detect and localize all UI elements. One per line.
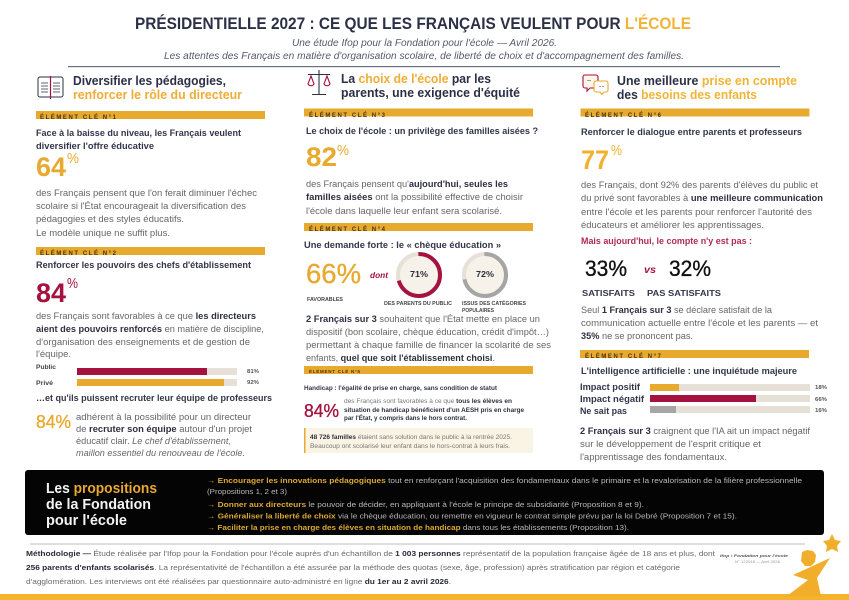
body text 64% [36,188,258,238]
key element 4: ÉLÉMENT CLÉ N°4 [309,225,386,233]
body text 84% [36,311,264,359]
dont: dont [370,270,389,280]
stat 77% [581,142,622,175]
key element 2 [36,247,265,257]
propositions list [207,476,802,532]
body text 84%: des Français sont favorables à ce que les directeurs [36,311,256,321]
stat 66%: FAVORABLES [307,297,344,303]
body text satisfaction: communication actuelle entre l'école et les parents — et [581,318,819,328]
key element 4 question: Une demande forte : le « chèque éducation » [304,240,501,250]
propositions list: → Généraliser la liberté de choix via le chèque éducation, ou remettre en vigueur le contrat simple prévu par la loi Debré (Proposition 7 et 15). [207,512,737,520]
body text 77%: des Français, dont 92% des parents d'élèves du public et [581,180,819,190]
stat comparison 33% vs 32%: PAS SATISFAITS [647,289,722,298]
callout: 48 726 familles: Beaucoup ont scolarisé leur enfant dans le hors-contrat à leurs frais. [310,443,510,450]
body text IA: sur le développement de l'esprit critique et [580,439,762,449]
stat 66% [306,258,361,303]
body text 66% [306,314,552,363]
stat comparison 33% vs 32%: 33% [585,256,627,281]
bar chart: public / privé: 92% [247,380,259,386]
methodology [26,549,715,586]
key element 7 question: L'intelligence artificielle : une inquiétude majeure [581,366,797,376]
body text 77%: éducateurs et améliorer les apprentissages. [581,220,764,230]
subtitle: Les attentes des Français en matière d'organisation scolaire, de liberté de choix et d'accompagnement des familles. [164,51,684,62]
bottom bar [0,594,849,600]
stat 82% [306,142,349,172]
title: PRÉSIDENTIELLE 2027 : CE QUE LES FRANÇAIS VEULENT POUR L'ÉCOLE [135,14,691,33]
key element 6 [580,108,810,119]
body text 82%: des Français pensent qu' aujourd'hui, seules les [306,179,508,189]
panel: diversifier les pédagogies [36,73,272,458]
body text IA [580,426,811,462]
donut: 71% parents du public: DES PARENTS DU PUBLIC [384,301,452,307]
body text 66%: enfants, quel que soit l'établissement choisi. [306,353,495,363]
stat 77%: % [611,142,622,159]
heading [617,73,797,102]
body text 64%: Le modèle unique ne suffit plus. [36,228,170,238]
donut: 72% catégories populaires: ISSUS DES CATÉGORIES [462,299,527,307]
propositions list: → Donner aux directeurs le pouvoir de décider, en appliquant à l'école le principe de subsidiarité (Proposition 8 et 9). [207,500,644,509]
icon: speech bubbles [583,75,608,94]
heading: des besoins des enfants [617,87,757,102]
bar chart: intelligence artificielle: Impact négatif [580,394,645,404]
subtitle: Une étude Ifop pour la Fondation pour l'école — Avril 2026. [292,38,557,49]
bar chart: intelligence artificielle [580,382,827,416]
body text IA: 2 Français sur 3 craignent que l'IA ait un impact négatif [580,426,811,436]
key element 3: ÉLÉMENT CLÉ N°3 [309,111,386,119]
stat 84% recruit: 84% [36,412,71,432]
methodology: 256 parents d'enfants scolarisés . La représentativité de l'échantillon a été assurée par la méthode des quotas (sexe, âge, profession) après stratification par région et catégorie [26,563,680,572]
bar chart: intelligence artificielle: Ne sait pas [580,406,627,416]
body text IA: l'apprentissage des fondamentaux. [580,452,727,462]
heading: La choix de l'école par les [341,71,491,86]
icon: foundation logo [787,534,841,596]
stat 84%: % [67,275,78,292]
stat comparison 33% vs 32%: vs [644,265,656,276]
heading: parents, une exigence d'équité [341,85,520,100]
subtitle [164,38,684,62]
stat 82%: 82 [306,142,337,172]
bar chart: intelligence artificielle: 18% [815,385,827,391]
key element 6: ÉLÉMENT CLÉ N°6 [585,111,662,119]
source note: Ifop • Fondation pour l'école [720,553,789,558]
heading: Diversifier les pédagogies, [73,73,226,88]
body text satisfaction [581,305,819,341]
key element 5: ÉLÉMENT CLÉ N°5 [309,367,360,374]
body text recruit: éducatif clair. Le chef d'établissement, [76,436,231,446]
stat comparison 33% vs 32% [582,256,722,298]
source note [720,553,789,564]
donut: 71% parents du public [384,254,452,307]
body text 82%: familles aisées ont la possibilité effective de choisir [306,192,523,202]
heading: Une meilleure prise en compte [617,73,797,88]
body text 82% [306,179,523,216]
key element 3 [304,108,533,119]
stat 64% [36,150,79,182]
body text 77% [581,180,823,230]
body text 66%: permettant à chaque famille de financer la scolarité de ses [306,340,552,350]
key element 1: ÉLÉMENT CLÉ N°1 [40,113,117,121]
panel: besoins des enfants [580,73,827,462]
key element 2 question: Renforcer les pouvoirs des chefs d'établissement [36,260,251,270]
methodology: Méthodologie — Étude réalisée par l'Ifop pour la Fondation pour l'école auprès d'un échantillon de 1 003 personnes représentatif de la population française âgée de 18 ans et plus, dont [26,549,715,558]
bar chart: public / privé: 81% [247,369,259,375]
bar chart: intelligence artificielle: 16% [815,408,827,414]
stat 84%: 84 [36,278,66,308]
body text handicap [344,398,524,422]
body text 82%: l'école dans laquelle leur enfant sera scolarisé. [306,206,502,216]
propositions heading: de la Fondation [46,496,151,513]
body text recruit: de recruter son équipe autour d'un projet [76,424,253,434]
body text 77%: du privé sont favorables à une meilleure communication [581,193,823,203]
propositions list: → Encourager les innovations pédagogiques tout en renforçant l'acquisition des fondamentaux dans le primaire et la revalorisation de la filière professionnelle [207,476,802,485]
body text 64%: des Français pensent que l'on ferait diminuer l'échec [36,188,258,198]
propositions heading [46,480,157,529]
donut: 71% parents du public: 71% [410,270,428,279]
panel: choix de l'école [304,70,552,453]
donut: 72% catégories populaires [462,254,527,314]
stat 64%: % [67,150,79,167]
donut: 72% catégories populaires: POPULAIRES [462,308,495,314]
key element 1 question: diversifier l'offre éducative [36,141,154,151]
icon: scales [308,70,330,94]
propositions list: → Faciliter la prise en charge des élèves en situation de handicap dans tous les établissements (Proposition 13). [207,523,629,532]
stat 77%: 77 [581,145,609,175]
key element 1 question [36,128,241,151]
methodology: d'agglomération. Les interviews ont été réalisées par questionnaire auto-administré en ligne du 1er au 2 avril 2026 . [26,577,451,586]
key element 7: ÉLÉMENT CLÉ N°7 [585,352,662,360]
body text 84%: d'organisation des enseignements et de gestion de [36,337,250,347]
sub-heading recruitment: …et qu'ils puissent recruter leur équipe de professeurs [36,393,272,403]
body text 66%: dispositif (bon scolaire, chèque éducation, crédit d'impôt…) [306,327,549,337]
stat 84% [36,275,78,308]
key element 5 question: Handicap : l'égalité de prise en charge, sans condition de statut [304,385,498,392]
bar chart: public / privé: Privé [36,381,54,387]
body text recruit: maillon essentiel du renouveau de l'école. [76,448,245,458]
body text 77%: entre l'école et les parents pour renforcer l'autorité des [581,207,813,217]
key element 2: ÉLÉMENT CLÉ N°2 [40,249,117,257]
callout: 48 726 familles: 48 726 familles étaient sans solution dans le public à la rentrée 2025. [310,434,512,441]
body text 84%: l'équipe. [36,349,71,359]
bar chart: public / privé: Public [36,365,57,371]
body text 66%: 2 Français sur 3 souhaitent que l'État mette en place un [306,314,540,324]
key element 1 question: Face à la baisse du niveau, les Français veulent [36,128,241,138]
body text handicap: situation de handicap bénéficient d'un AESH pris en charge [344,407,524,414]
propositions heading: Les propositions [46,480,157,497]
body text 84%: aient des pouvoirs renforcés en matière de discipline, [36,324,264,334]
key element 5 [304,366,533,374]
heading [73,73,242,102]
stat 82%: % [337,142,349,159]
key element 6 question: Renforcer le dialogue entre parents et professeurs [581,127,802,137]
body text recruit: adhérent à la possibilité pour un directeur [76,412,251,422]
key element 1 [36,111,265,121]
body text 64%: scolaire si l'État encourageait la diversification des [36,201,247,211]
body text recruit [76,412,253,458]
body text 64%: pédagogies et des styles éducatifs. [36,214,184,224]
stat 66%: 66% [306,258,361,289]
donut: 72% catégories populaires: 72% [476,270,494,279]
key element 4 [304,223,533,233]
body text satisfaction: Seul 1 Français sur 3 se déclare satisfait de la [581,305,772,315]
propositions list: (Propositions 1, 2 et 3) [207,487,287,496]
propositions heading: pour l'école [46,512,127,529]
body text handicap: des Français sont favorables à ce que tous les élèves en [344,398,512,405]
stat comparison 33% vs 32%: SATISFAITS [582,289,636,298]
icon: open book [38,76,63,99]
source note: N° 122018 — Avril 2026 [735,560,780,564]
heading: renforcer le rôle du directeur [73,87,242,102]
key element 3 question: Le choix de l'école : un privilège des familles aisées ? [306,126,538,136]
callout: 48 726 familles [304,428,533,453]
bar chart: public / privé [36,365,259,387]
panel: propositions [25,470,824,535]
bar chart: intelligence artificielle: 66% [815,397,827,403]
heading [341,71,520,100]
body text satisfaction: 35% ne se prononcent pas. [581,331,693,341]
stat 84% handicap: 84% [304,401,339,421]
stat comparison 33% vs 32%: 32% [669,256,711,281]
key element 7 [580,350,809,360]
stat 64%: 64 [36,152,66,182]
alert line: Mais aujourd'hui, le compte n'y est pas : [581,236,752,246]
body text handicap: par l'État, y compris dans le hors contrat. [344,413,467,422]
bar chart: intelligence artificielle: Impact positif [580,382,641,392]
